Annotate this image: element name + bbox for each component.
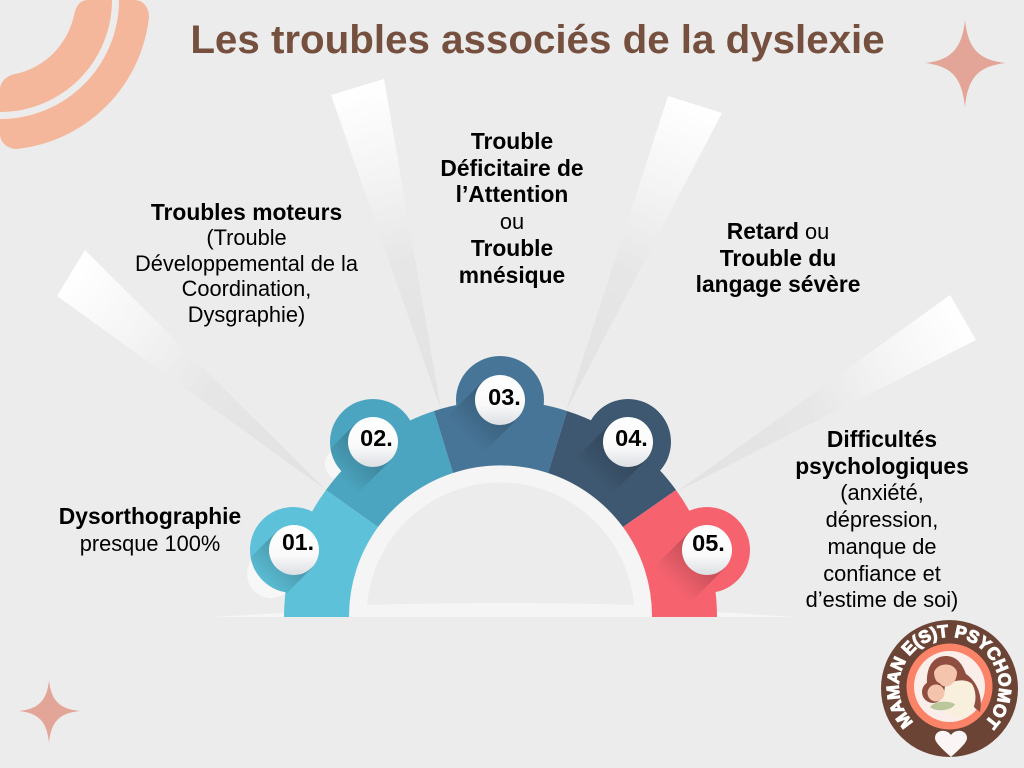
text block 04: Trouble du (720, 245, 836, 271)
logo badge (881, 620, 1018, 757)
text block 03: l’Attention (456, 181, 568, 207)
text block 03 (440, 128, 584, 288)
text block 03: Trouble (471, 235, 553, 261)
text block 03: Déficitaire de (440, 155, 584, 181)
text block 04: langage sévère (696, 271, 860, 297)
segment 03: 03. (488, 384, 521, 410)
text block 05: manque de (827, 534, 937, 559)
segment 05 (623, 490, 750, 617)
star: bottom left (19, 680, 80, 743)
text block 02: Troubles moteurs (151, 199, 342, 225)
segment 01: 01. (282, 529, 314, 555)
segment 02 (320, 399, 453, 527)
ray 4 (678, 295, 976, 491)
text block 05: confiance et (823, 561, 941, 586)
ray 1 (57, 250, 326, 490)
text block 03: Trouble (471, 128, 553, 154)
text block 02: (Trouble (206, 225, 287, 250)
ground highlights (210, 612, 795, 617)
title: Les troubles associés de la dyslexie (190, 17, 885, 62)
text block 04 (696, 218, 860, 297)
segment 05: 05. (692, 530, 725, 556)
text block 01: presque 100% (80, 531, 220, 556)
logo illustration: mother and child (922, 656, 981, 718)
text block 05: Difficultés (827, 426, 937, 452)
text block 01: Dysorthographie (59, 503, 241, 529)
segment 02: 02. (360, 425, 393, 451)
text block 01 (59, 503, 241, 556)
pale shadows behind bumps (247, 448, 357, 598)
text block 05 (795, 426, 969, 612)
logo heart (935, 731, 967, 757)
star: top right (925, 20, 1006, 107)
decorative peach curved band (0, 0, 149, 149)
ray 2 (331, 79, 441, 410)
semicircle inner panel (367, 483, 634, 605)
ray 3 (566, 96, 722, 411)
segment 04 (548, 399, 676, 527)
text block 05: (anxiété, (840, 480, 924, 505)
segment 03 (434, 356, 567, 473)
text block 02: Coordination, (182, 276, 311, 301)
text block 05: dépression, (826, 507, 938, 532)
text block 02: Développemental de la (135, 251, 358, 276)
text block 02 (135, 199, 358, 327)
text block 03: ou (500, 209, 524, 234)
semicircle white ring (349, 466, 652, 617)
logo lettering: MAMAN E(S)T PSYCHOMOT (886, 624, 1012, 731)
segment 04: 04. (615, 425, 648, 451)
text block 04: Retard ou (727, 218, 829, 244)
text block 05: d’estime de soi) (806, 587, 958, 612)
text block 02: Dysgraphie) (188, 302, 305, 327)
text block 03: mnésique (459, 262, 565, 288)
segment 01 (241, 490, 378, 617)
text block 05: psychologiques (795, 453, 969, 479)
